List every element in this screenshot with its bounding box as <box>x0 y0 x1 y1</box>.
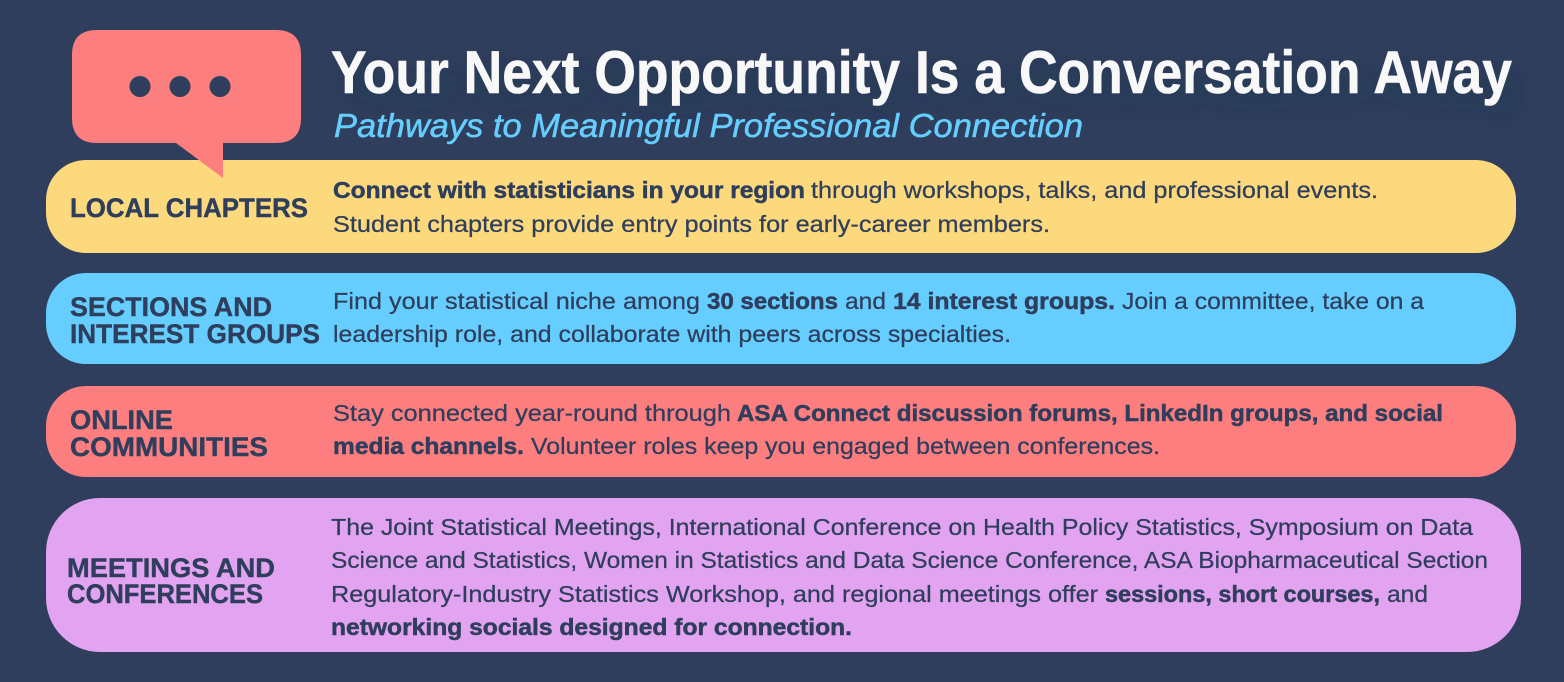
text: sections description: Join a committee, take on a <box>1122 288 1425 314</box>
text: meetings description: and <box>1387 581 1428 607</box>
label: online communities <box>70 405 268 462</box>
label: meetings and conferences: CONFERENCES <box>67 579 263 609</box>
text: online communities description: ASA Connect discussion forums, LinkedIn groups, and social <box>737 400 1443 426</box>
text: sections description: Find your statistical niche among <box>333 288 700 314</box>
panel: sections and interest groups <box>46 273 1516 364</box>
text: meetings description <box>331 514 1488 640</box>
text: sections description <box>333 288 1425 347</box>
text: sections description: and <box>845 288 886 314</box>
label: local chapters: LOCAL CHAPTERS <box>70 193 308 223</box>
text: online communities description <box>333 400 1443 459</box>
label: meetings and conferences: MEETINGS AND <box>67 553 275 583</box>
label: online communities: ONLINE <box>70 405 173 435</box>
panel: online communities <box>46 386 1516 477</box>
text: sections description: leadership role, and collaborate with peers across specialties. <box>333 321 1011 347</box>
text: meetings description: networking socials designed for connection. <box>331 614 852 640</box>
text: local chapters description: Connect with statisticians in your region <box>333 177 805 203</box>
text: online communities description: Volunteer roles keep you engaged between conferences. <box>531 433 1160 459</box>
label: meetings and conferences <box>67 553 275 609</box>
text: local chapters description: through workshops, talks, and professional events. <box>811 177 1378 203</box>
text: meetings description: Science and Statistics, Women in Statistics and Data Science Conference, ASA Biopharmaceutical Section <box>331 547 1488 573</box>
label: sections and interest groups: SECTIONS AND <box>70 292 272 322</box>
subtitle: Pathways to Meaningful Professional Connection <box>334 107 1083 144</box>
text: meetings description: sessions, short courses, <box>1105 581 1380 607</box>
text: sections description: 14 interest groups. <box>893 288 1115 314</box>
text: meetings description: The Joint Statistical Meetings, International Conference on Health Policy Statistics, Symposium on Data <box>331 514 1474 540</box>
label: online communities: COMMUNITIES <box>70 432 268 462</box>
icon: speech bubble <box>72 30 301 178</box>
text: online communities description: media channels. <box>333 433 524 459</box>
panel: local chapters <box>46 160 1516 253</box>
text: sections description: 30 sections <box>707 288 838 314</box>
text: local chapters description: Student chapters provide entry points for early-career members. <box>333 211 1050 237</box>
label: sections and interest groups <box>70 292 320 349</box>
label: sections and interest groups: INTEREST GROUPS <box>70 319 320 349</box>
text: online communities description: Stay connected year-round through <box>333 400 731 426</box>
text: meetings description: Regulatory-Industry Statistics Workshop, and regional meetings offer <box>331 581 1098 607</box>
panel: meetings and conferences <box>46 498 1521 652</box>
text: local chapters description <box>333 177 1378 237</box>
